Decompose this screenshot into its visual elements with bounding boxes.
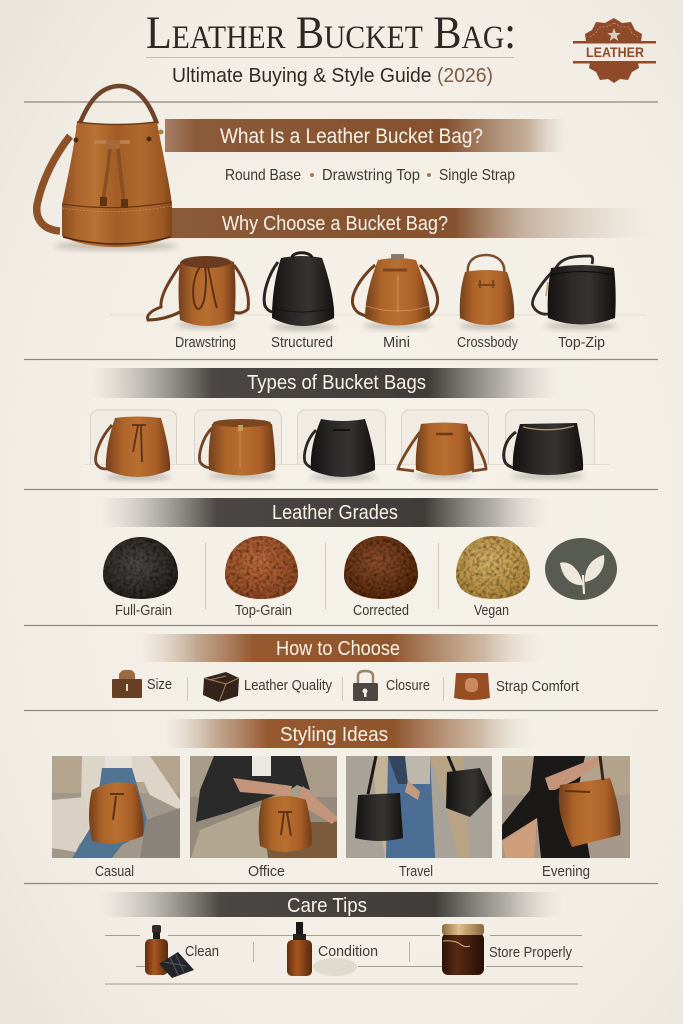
icon: storage jar bbox=[442, 924, 484, 975]
type bag 5 bbox=[504, 423, 585, 479]
definition features: Single Strap bbox=[439, 167, 515, 184]
swatch: full-grain bbox=[103, 537, 178, 599]
grade dividers and labels: Top-Grain bbox=[235, 603, 292, 619]
swatch: top-grain bbox=[225, 536, 298, 599]
bag row labels: Drawstring bbox=[175, 335, 236, 351]
banner: what is a leather bucket bag: What Is a Leather Bucket Bag? bbox=[220, 125, 483, 148]
type bag 4 bbox=[398, 422, 486, 479]
definition features bbox=[225, 167, 515, 184]
photo: office bbox=[190, 756, 338, 858]
bag row labels: Mini bbox=[383, 335, 410, 351]
icon: conditioner bottle and stone bbox=[287, 922, 357, 976]
banner: styling ideas: Styling Ideas bbox=[280, 724, 388, 746]
definition features: Drawstring Top bbox=[322, 167, 420, 184]
icon: leather badge bbox=[573, 18, 656, 83]
care tips row: Clean bbox=[185, 943, 219, 960]
icon: leaf badge bbox=[545, 538, 617, 600]
grade dividers and labels: Vegan bbox=[474, 603, 509, 619]
bag row bbox=[110, 253, 645, 330]
photo: travel bbox=[346, 756, 492, 858]
icon: strap comfort bbox=[454, 673, 490, 700]
swatch: vegan bbox=[456, 536, 530, 599]
grade dividers and labels: Corrected bbox=[353, 603, 409, 619]
banner: how to choose bbox=[140, 634, 545, 662]
icon: size bbox=[112, 670, 142, 698]
banner: types of bucket bags: Types of Bucket Bags bbox=[247, 372, 426, 394]
grade dividers and labels: Full-Grain bbox=[115, 603, 172, 619]
care tips row bbox=[105, 922, 583, 984]
how to choose items: Closure bbox=[386, 678, 430, 694]
how to choose items bbox=[112, 670, 579, 702]
banner: care tips: Care Tips bbox=[287, 895, 367, 917]
type bag 2 bbox=[200, 419, 276, 479]
grade dividers and labels bbox=[115, 543, 509, 619]
icon: leather quality bbox=[203, 672, 239, 702]
swatch: corrected bbox=[344, 536, 418, 599]
type bag 1 bbox=[96, 416, 171, 480]
bag: crossbody bbox=[459, 255, 515, 329]
banner: leather grades bbox=[100, 498, 550, 527]
banner: why choose a bucket bag bbox=[170, 208, 660, 238]
bag: drawstring bbox=[148, 256, 248, 328]
definition features: Round Base bbox=[225, 167, 301, 184]
how to choose items: Size bbox=[147, 677, 172, 693]
icon: leather badge: LEATHER bbox=[586, 44, 644, 60]
styling labels bbox=[95, 864, 590, 880]
bag row labels bbox=[175, 335, 605, 351]
styling labels: Office bbox=[248, 864, 285, 880]
photo: casual bbox=[52, 756, 180, 858]
styling labels: Travel bbox=[399, 864, 433, 880]
icon: cleaner bottle and brush bbox=[145, 925, 194, 978]
bag type cards bbox=[85, 410, 610, 480]
styling labels: Casual bbox=[95, 864, 134, 880]
photo: evening bbox=[502, 756, 630, 858]
type bag 3 bbox=[304, 419, 376, 480]
care tips row: Condition bbox=[318, 943, 378, 960]
bag row labels: Crossbody bbox=[457, 335, 519, 351]
bag row labels: Top-Zip bbox=[558, 335, 605, 351]
title: Leather Bucket Bag: bbox=[146, 7, 516, 59]
banner: care tips bbox=[100, 892, 565, 917]
bag row labels: Structured bbox=[271, 335, 333, 351]
how to choose items: Leather Quality bbox=[244, 678, 333, 694]
icon: closure lock bbox=[353, 671, 378, 701]
subtitle: Ultimate Buying & Style Guide (2026) bbox=[172, 64, 493, 87]
banner: leather grades: Leather Grades bbox=[272, 502, 398, 524]
care tips row: Store Properly bbox=[489, 944, 572, 961]
styling labels: Evening bbox=[542, 864, 590, 880]
banner: how to choose: How to Choose bbox=[276, 638, 400, 660]
bag: mini bbox=[352, 254, 438, 329]
hero bag illustration bbox=[37, 86, 178, 250]
banner: styling ideas bbox=[165, 719, 535, 748]
bag: structured bbox=[264, 253, 335, 330]
bag: top-zip bbox=[532, 256, 617, 329]
how to choose items: Strap Comfort bbox=[496, 679, 579, 695]
leather grade swatches bbox=[103, 536, 617, 600]
banner: what is a leather bucket bag bbox=[165, 119, 567, 152]
banner: types of bucket bags bbox=[90, 368, 560, 398]
banner: why choose a bucket bag: Why Choose a Bucket Bag? bbox=[222, 212, 448, 235]
